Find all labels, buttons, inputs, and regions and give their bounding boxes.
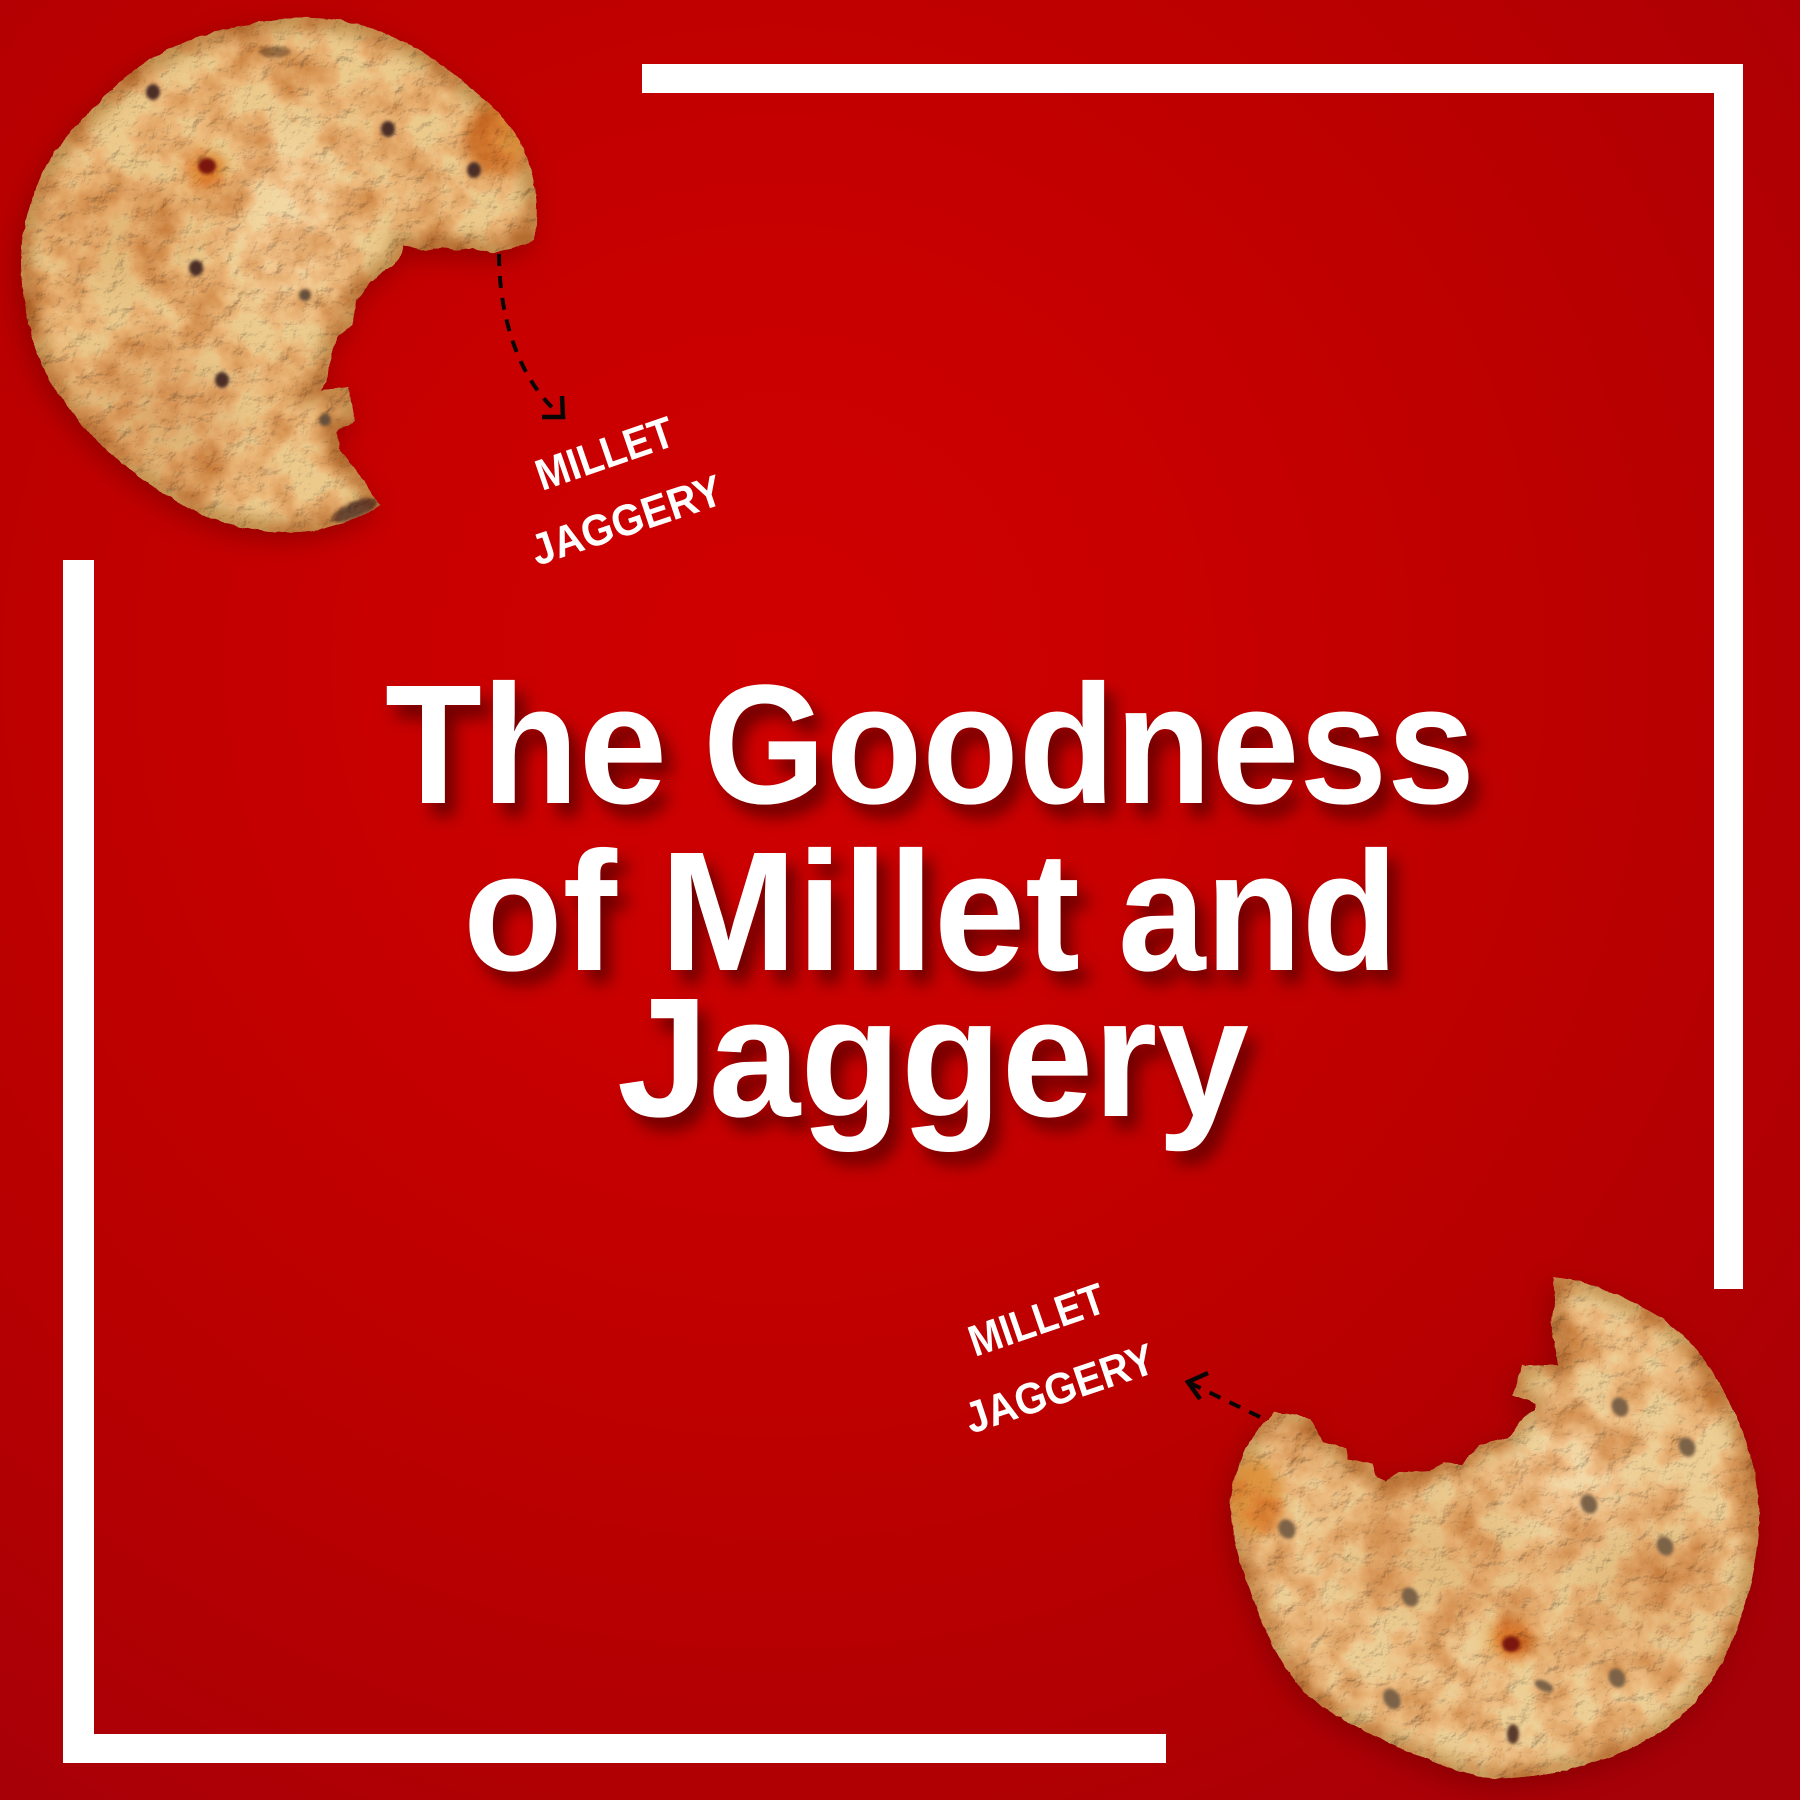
title: The [385, 650, 667, 840]
cookie: bottom right, bitten [1228, 1277, 1759, 1778]
title: of [463, 817, 617, 1007]
label: top MILLET: MILLET [529, 408, 681, 500]
label: top JAGGERY: JAGGERY [525, 466, 729, 575]
label: bottom MILLET: MILLET [962, 1274, 1112, 1366]
title: Goodness [703, 650, 1475, 840]
cookie shadow: top left [17, 25, 532, 540]
arrow: top cookie to labels [499, 254, 563, 417]
title: and [1118, 817, 1398, 1007]
cookie specks: bottom right [1276, 1395, 1698, 1744]
frame: left and bottom white bars [63, 560, 1166, 1763]
arrow: bottom cookie to labels [1188, 1373, 1260, 1417]
cookie specks: top left [146, 84, 481, 426]
label: bottom JAGGERY: JAGGERY [959, 1335, 1161, 1443]
title [385, 650, 1475, 1153]
cookie: top left, bitten [21, 17, 536, 532]
cookie shadow: bottom right [1227, 1285, 1755, 1786]
title: Jaggery [617, 963, 1249, 1153]
frame: top and right white bars [642, 64, 1743, 1289]
title: Millet [660, 817, 1080, 1007]
